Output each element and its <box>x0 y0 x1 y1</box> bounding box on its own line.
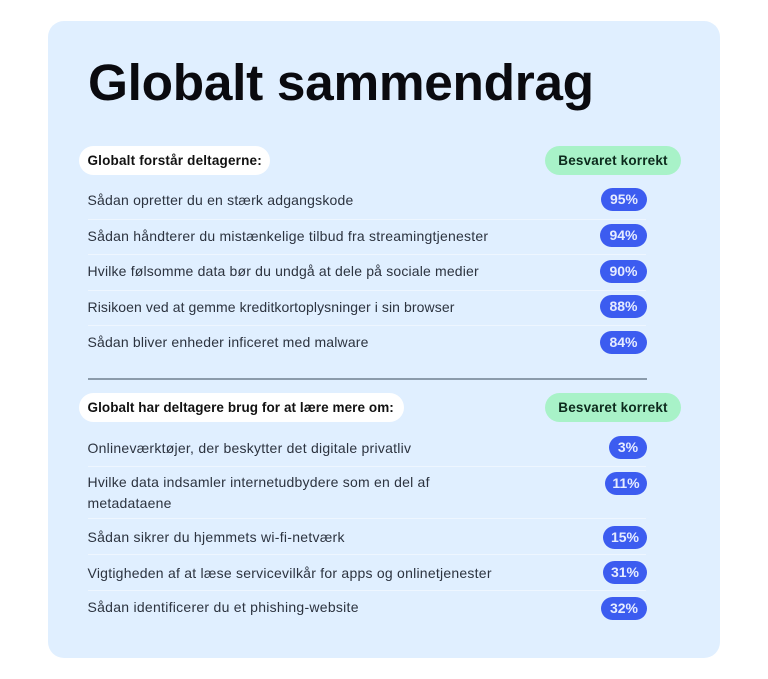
row text 7: metadataene <box>88 495 172 511</box>
row text 7 <box>88 474 430 511</box>
heading: understood <box>79 146 270 175</box>
value 11%: 11% <box>612 475 640 491</box>
value 11% <box>605 472 647 495</box>
heading: understood: Globalt forstår deltagerne: <box>88 153 262 168</box>
column label: answered correctly: Besvaret korrekt <box>558 153 668 168</box>
row text 8: Sådan sikrer du hjemmets wi-fi-netværk <box>88 529 345 545</box>
value 31% <box>603 561 647 584</box>
value 84% <box>600 331 647 354</box>
value 15% <box>603 526 647 549</box>
value 32%: 32% <box>610 600 638 616</box>
value 3% <box>609 436 647 459</box>
row text 5: Sådan bliver enheder inficeret med malware <box>88 334 369 350</box>
value 15%: 15% <box>611 529 639 545</box>
value 88%: 88% <box>609 298 638 314</box>
row text 7: Hvilke data indsamler internetudbydere som en del af <box>88 474 430 490</box>
row text 4: Risikoen ved at gemme kreditkortoplysninger i sin browser <box>88 299 454 315</box>
column label: answered correctly: Besvaret korrekt <box>558 400 668 415</box>
value 95%: 95% <box>610 191 638 207</box>
row text 3: Hvilke følsomme data bør du undgå at dele på sociale medier <box>88 263 479 279</box>
row text 6: Onlineværktøjer, der beskytter det digitale privatliv <box>88 440 411 456</box>
column label: answered correctly <box>545 393 681 422</box>
value 90% <box>600 260 647 283</box>
value 84%: 84% <box>609 334 638 350</box>
heading: need to learn <box>79 393 404 422</box>
title: Globalt sammendrag <box>88 53 594 111</box>
value 94% <box>600 224 647 247</box>
row text 2: Sådan håndterer du mistænkelige tilbud fra streamingtjenester <box>88 228 488 244</box>
value 94%: 94% <box>609 227 638 243</box>
value 32% <box>601 597 647 620</box>
value 31%: 31% <box>611 564 639 580</box>
row text 1: Sådan opretter du en stærk adgangskode <box>88 192 354 208</box>
value 88% <box>600 295 647 318</box>
column label: answered correctly <box>545 146 681 175</box>
value 95% <box>601 188 647 211</box>
value 3%: 3% <box>618 439 638 455</box>
heading: need to learn: Globalt har deltagere brug for at lære mere om: <box>88 400 394 415</box>
value 90%: 90% <box>609 263 638 279</box>
row text 9: Vigtigheden af at læse servicevilkår for apps og onlinetjenester <box>88 565 492 581</box>
row text 10: Sådan identificerer du et phishing-website <box>88 599 359 615</box>
